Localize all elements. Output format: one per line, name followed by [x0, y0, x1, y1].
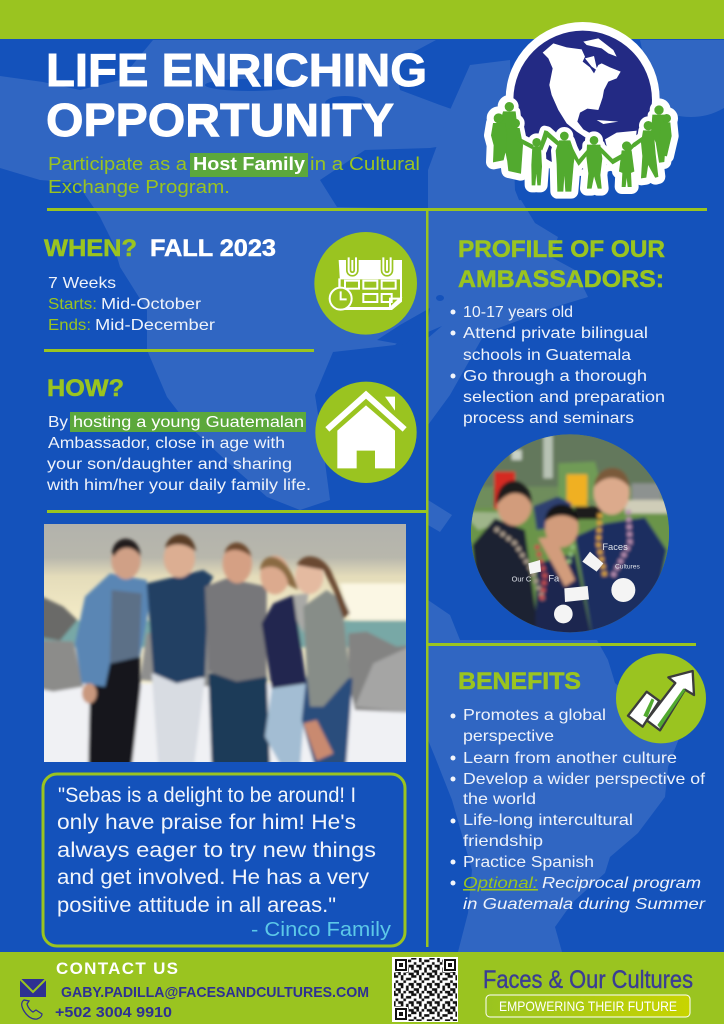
how heading: HOW?	[47, 375, 124, 402]
subtitle: Participate as a	[48, 153, 188, 174]
benefits list: the world	[463, 791, 536, 808]
panel: profile of our ambassadors	[450, 236, 682, 643]
icon: house	[315, 382, 417, 483]
subtitle: in a Cultural	[310, 153, 420, 174]
profile list: schools in Guatemala	[463, 347, 631, 364]
when heading: FALL 2023	[150, 235, 276, 262]
person 1	[88, 657, 141, 767]
name tags and shirt globes: Cultures	[615, 563, 640, 570]
icon: growth arrow	[616, 653, 706, 743]
email: GABY.PADILLA@FACESANDCULTURES.COM	[61, 984, 369, 1001]
profile heading: AMBASSADORS:	[458, 266, 664, 293]
small boy	[535, 553, 593, 643]
panel dividers	[44, 208, 707, 947]
benefits list: Develop a wider perspective of	[463, 771, 706, 788]
profile list: selection and preparation	[463, 389, 665, 406]
profile list: Attend private bilingual	[463, 325, 648, 342]
logo: Faces & Our Cultures	[483, 966, 693, 1017]
profile list: Go through a thorough	[463, 368, 647, 385]
panel: when	[44, 232, 417, 335]
when heading	[44, 235, 276, 262]
tagline: EMPOWERING THEIR FUTURE	[499, 998, 677, 1014]
panel: footer	[0, 952, 724, 1024]
benefits list: Learn from another culture	[463, 750, 677, 767]
how text: By	[48, 414, 68, 431]
when details: Starts:	[48, 296, 97, 313]
profile heading	[458, 236, 665, 293]
when details: Mid-December	[95, 317, 216, 334]
benefits list: Practice Spanish	[463, 854, 594, 871]
icon: calendar	[314, 232, 417, 335]
profile heading: PROFILE OF OUR	[458, 236, 665, 263]
title: LIFE ENRICHING	[46, 44, 427, 96]
family photo	[37, 524, 413, 770]
person 4	[265, 683, 307, 767]
name tags and shirt globes	[512, 542, 640, 623]
icon: envelope	[20, 979, 46, 997]
icon: globe with families logo	[491, 22, 671, 191]
map gulf details	[205, 79, 444, 345]
name tags and shirt globes: Our C	[512, 575, 532, 584]
how text: Ambassador, close in age with	[48, 435, 285, 452]
profile list: process and seminars	[463, 410, 634, 427]
ambassadors circular photo	[471, 434, 669, 632]
QR code	[392, 957, 458, 1022]
subtitle	[48, 153, 420, 197]
title: OPPORTUNITY	[46, 94, 394, 146]
person 2	[152, 673, 205, 767]
person 3	[208, 673, 270, 767]
name tags and shirt globes: Fa	[548, 574, 560, 584]
quote text: "Sebas is a delight to be around! I	[58, 784, 356, 807]
logo: Faces & Our Cultures: Faces & Our Cultures	[483, 966, 693, 994]
benefits list: Reciprocal program	[542, 875, 701, 892]
hoodie girl	[472, 517, 538, 627]
when heading: WHEN?	[44, 235, 137, 262]
profile list	[450, 304, 665, 427]
icon: phone	[22, 1000, 42, 1019]
how text: hosting a young Guatemalan	[73, 414, 304, 431]
benefits list: Life-long intercultural	[463, 812, 633, 829]
when details	[48, 275, 216, 334]
quote text	[57, 784, 376, 917]
quote text: positive attitude in all areas."	[57, 894, 336, 917]
when details: Mid-October	[101, 296, 202, 313]
tagline	[486, 995, 690, 1017]
panel: benefits	[450, 653, 706, 913]
panel: how	[46, 375, 417, 494]
benefits heading: BENEFITS	[458, 668, 581, 695]
quote text: only have praise for him! He's	[57, 811, 356, 834]
benefits list: in Guatemala during Summer	[463, 896, 706, 913]
benefits list	[450, 707, 706, 913]
how text	[46, 412, 311, 494]
when details: 7 Weeks	[48, 275, 116, 292]
panel: testimonial quote	[43, 774, 405, 946]
benefits list: Promotes a global	[463, 707, 606, 724]
flower leis	[495, 528, 543, 600]
how text: your son/daughter and sharing	[47, 456, 292, 473]
panel: header	[46, 44, 427, 197]
contact heading: CONTACT US	[56, 959, 178, 978]
quote text: and get involved. He has a very	[57, 866, 370, 889]
quote attribution: - Cinco Family	[251, 919, 391, 941]
subtitle: Exchange Program.	[48, 176, 230, 197]
benefits list: friendship	[463, 833, 543, 850]
when details: Ends:	[48, 317, 91, 334]
tall boy	[575, 517, 667, 643]
title	[46, 44, 427, 146]
name tags and shirt globes: Faces	[602, 542, 628, 552]
subtitle: Host Family	[193, 153, 306, 174]
benefits list: perspective	[463, 728, 554, 745]
profile list: 10-17 years old	[463, 304, 573, 321]
top green band	[0, 0, 724, 39]
quote text: always eager to try new things	[57, 839, 376, 862]
phone number: +502 3004 9910	[55, 1004, 172, 1021]
benefits list: Optional:	[463, 875, 538, 892]
person 5	[302, 675, 353, 767]
how text: with him/her your daily family life.	[46, 477, 311, 494]
